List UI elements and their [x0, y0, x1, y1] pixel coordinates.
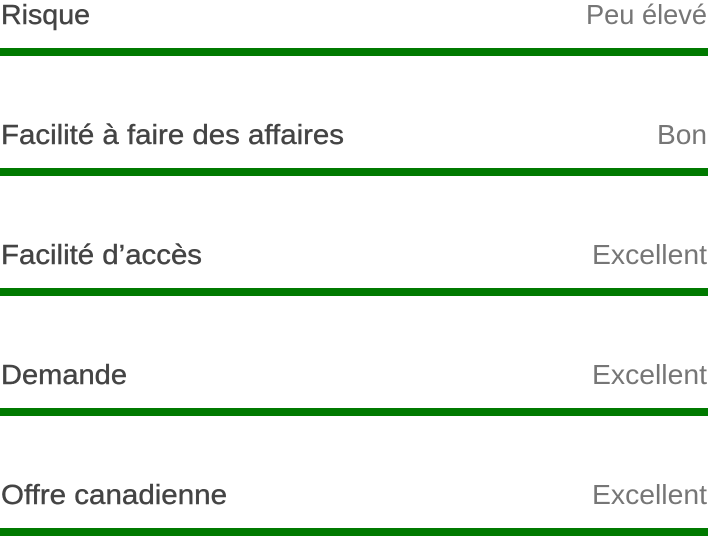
label: Demande: Demande — [1, 359, 127, 390]
label: Facilité à faire des affaires: Facilité à faire des affaires — [1, 119, 344, 150]
green bar — [0, 288, 708, 296]
row: Facilité à faire des affaires — [0, 119, 708, 176]
row: Facilité d'accès — [0, 239, 708, 296]
value: Excellent: Excellent — [592, 239, 707, 270]
value: Bon: Bon — [657, 119, 707, 150]
row: Risque — [0, 0, 708, 56]
value: Excellent: Excellent — [592, 359, 707, 390]
label: Offre canadienne: Offre canadienne — [1, 479, 227, 510]
green bar — [0, 528, 708, 536]
green bar — [0, 168, 708, 176]
green bar — [0, 48, 708, 56]
row: Demande — [0, 359, 708, 416]
green bar — [0, 408, 708, 416]
label: Facilité d'accès: Facilité d’accès — [1, 239, 202, 270]
row: Offre canadienne — [0, 479, 708, 536]
value: Excellent: Excellent — [592, 479, 707, 510]
